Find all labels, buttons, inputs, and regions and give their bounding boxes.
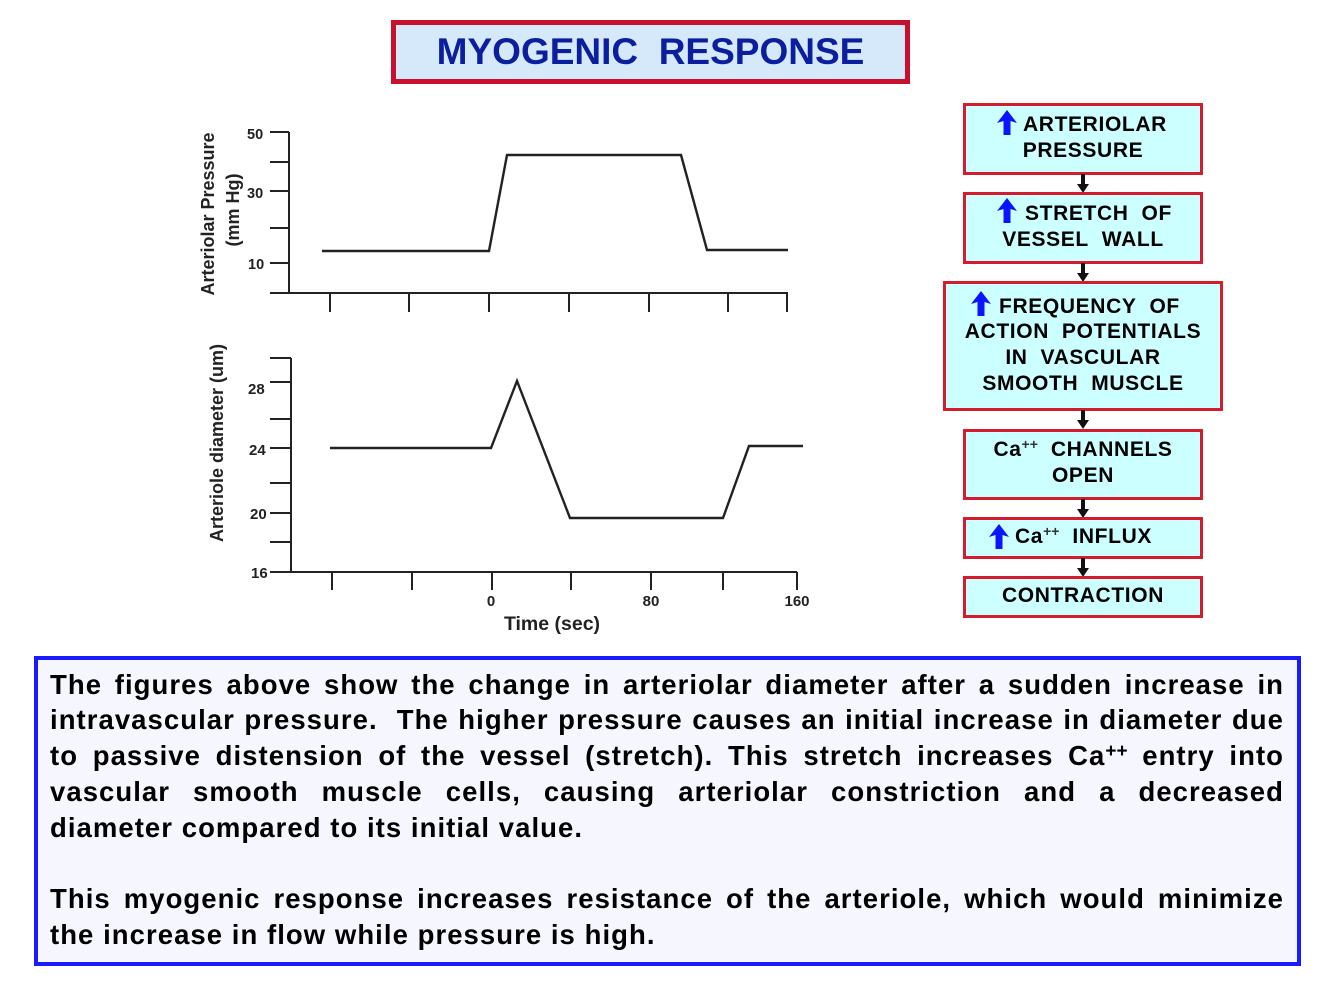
- chart: arteriole diameter: 20: [250, 506, 267, 523]
- chart: arteriole diameter: 80: [643, 593, 659, 610]
- explanation text: This myogenic response increases resistance of the arteriole, which would minimize: [50, 883, 1284, 914]
- step: stretch: STRETCH OF: [1025, 202, 1172, 225]
- charts: [198, 127, 810, 635]
- title: MYOGENIC RESPONSE: [437, 31, 864, 72]
- chart: arteriole diameter: 24: [249, 442, 266, 459]
- chart: arteriolar pressure: (mm Hg): [223, 174, 243, 246]
- chart: arteriolar pressure: 50: [247, 127, 263, 143]
- explanation text: the increase in flow while pressure is high.: [50, 919, 656, 950]
- chart: arteriolar pressure: 10: [248, 257, 264, 273]
- explanation text: [50, 669, 1284, 950]
- step: contraction: [963, 576, 1203, 618]
- arrow 2: [1077, 263, 1089, 281]
- step: arteriolar pressure: [963, 103, 1203, 175]
- step: arteriolar pressure: ARTERIOLAR: [1023, 113, 1167, 136]
- explanation text: to passive distension of the vessel (stretch). This stretch increases Ca++ entry into: [50, 740, 1284, 771]
- step: frequency: FREQUENCY OF: [999, 295, 1180, 318]
- step: channels: OPEN: [1052, 464, 1114, 487]
- chart: arteriole diameter: Time (sec): [504, 613, 600, 635]
- step: frequency: IN VASCULAR: [1005, 346, 1161, 369]
- step: contraction: CONTRACTION: [1002, 584, 1164, 607]
- step: stretch: [963, 192, 1203, 264]
- chart: arteriole diameter: [207, 344, 810, 635]
- chart: arteriole diameter: Arteriole diameter (um): [207, 344, 227, 542]
- arrow 3: [1077, 410, 1089, 429]
- chart: arteriole diameter: 0: [487, 593, 495, 610]
- step: influx: Ca++ INFLUX: [1015, 523, 1152, 548]
- chart: arteriole diameter: 16: [251, 565, 268, 582]
- step: stretch: VESSEL WALL: [1002, 228, 1164, 251]
- explanation panel: [34, 656, 1301, 966]
- chart: arteriolar pressure: 30: [247, 186, 263, 202]
- explanation text: vascular smooth muscle cells, causing arteriolar constriction and a decreased: [50, 776, 1284, 807]
- step: channels: Ca++ CHANNELS: [993, 436, 1173, 461]
- arrow 4: [1077, 499, 1089, 517]
- step: arteriolar pressure: PRESSURE: [1023, 139, 1143, 162]
- title: [391, 20, 910, 84]
- explanation text: The figures above show the change in arteriolar diameter after a sudden increase in: [50, 669, 1284, 700]
- step: influx: [963, 517, 1203, 559]
- chart: arteriole diameter: 28: [248, 381, 265, 398]
- step: frequency: SMOOTH MUSCLE: [982, 372, 1184, 395]
- arrow 1: [1077, 174, 1089, 192]
- step: channels: [963, 429, 1203, 500]
- chart: arteriole diameter: 160: [784, 593, 810, 610]
- flowchart: [943, 103, 1223, 618]
- chart: arteriolar pressure: Arteriolar Pressure: [198, 132, 218, 296]
- explanation text: intravascular pressure. The higher pressure causes an initial increase in diameter due: [50, 704, 1284, 735]
- step: frequency: ACTION POTENTIALS: [965, 320, 1201, 343]
- step: frequency: [943, 281, 1223, 411]
- chart: arteriolar pressure: [198, 127, 788, 312]
- arrow 5: [1077, 558, 1089, 576]
- explanation text: diameter compared to its initial value.: [50, 812, 583, 843]
